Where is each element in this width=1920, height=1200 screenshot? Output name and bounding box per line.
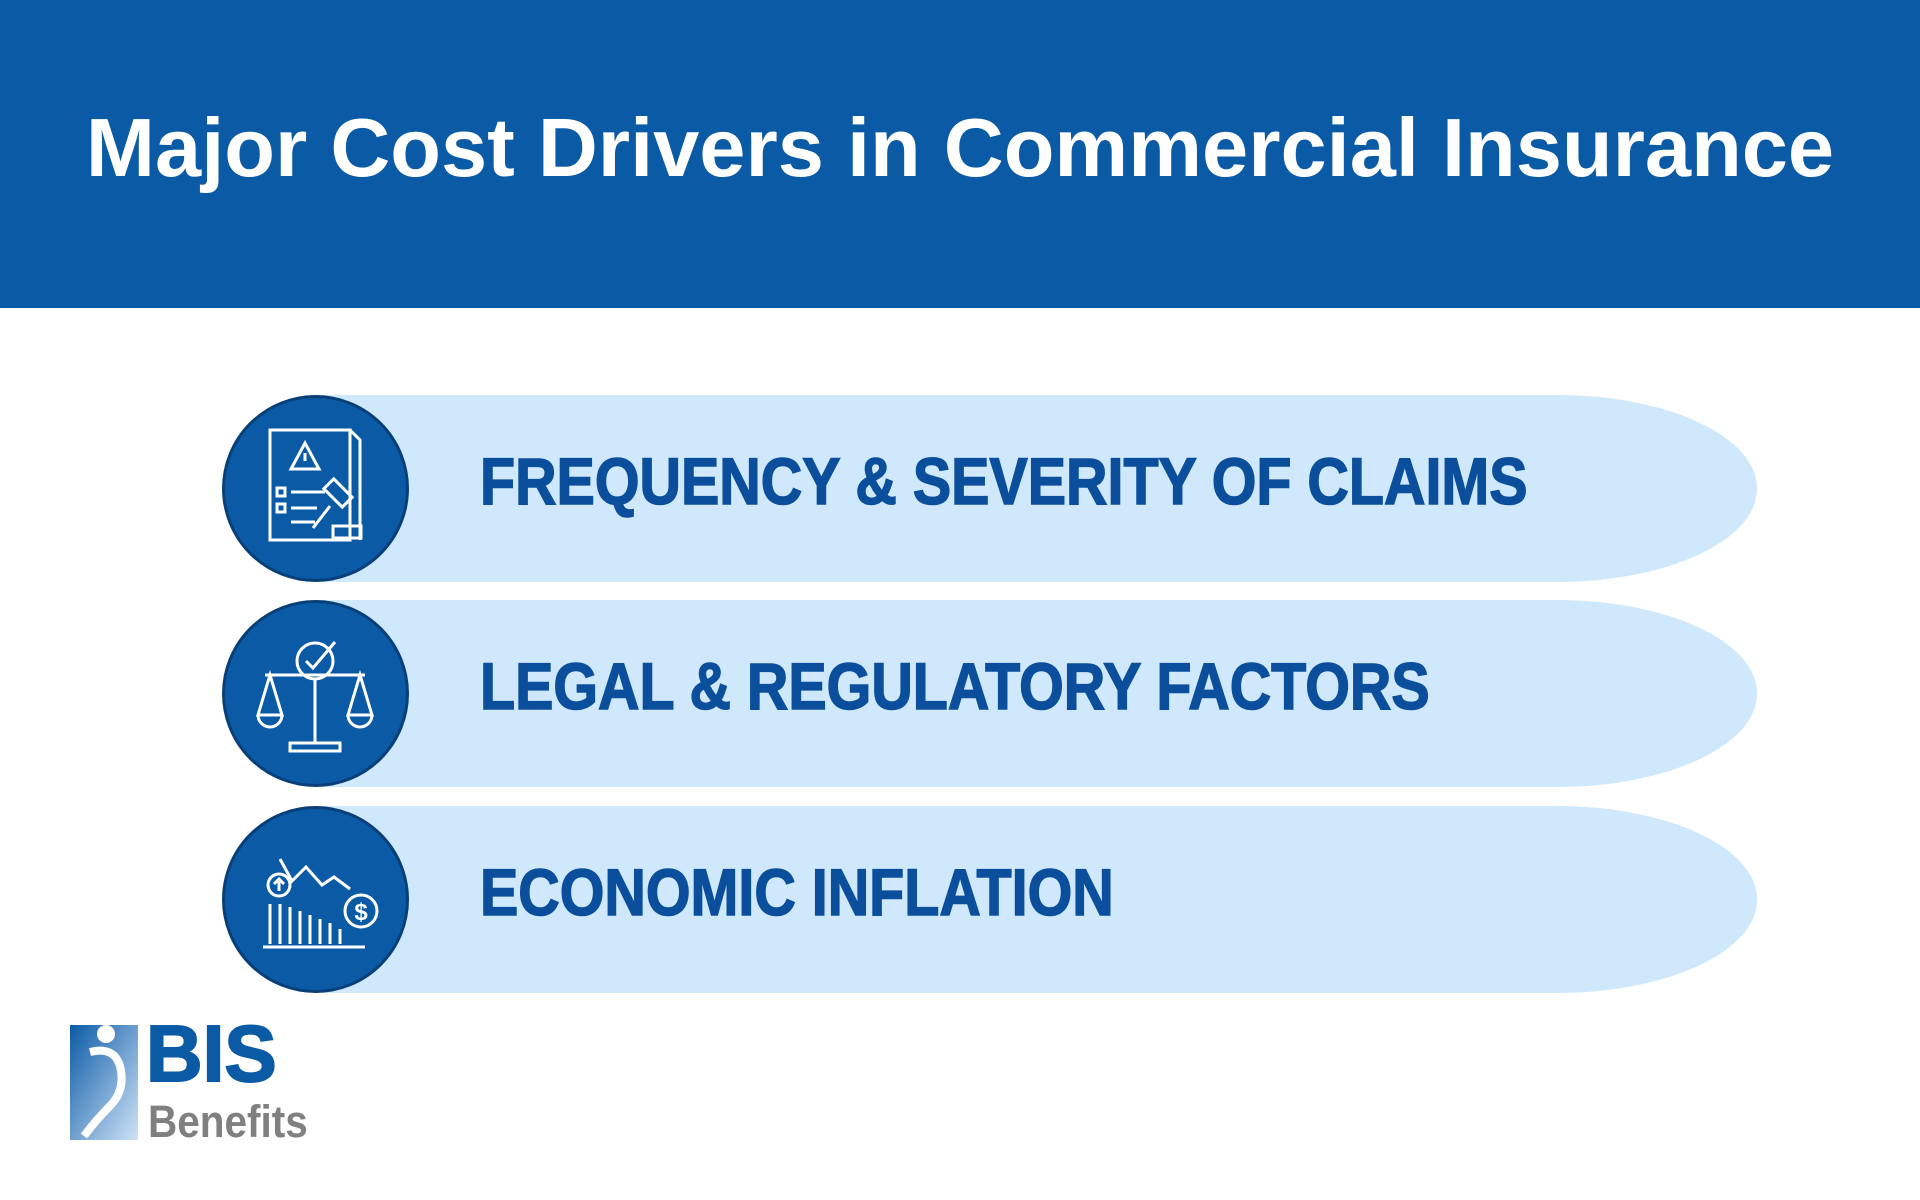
logo text: BIS: [146, 1009, 277, 1098]
label: FREQUENCY & SEVERITY OF CLAIMS: [480, 444, 1528, 518]
header banner: [0, 0, 1920, 308]
row: economic inflation: [222, 806, 1757, 993]
label: ECONOMIC INFLATION: [480, 855, 1114, 929]
logo: BIS Benefits: Benefits: [148, 1096, 308, 1147]
icon: document with warning and gavel: [222, 395, 409, 582]
label: LEGAL & REGULATORY FACTORS: [480, 649, 1430, 723]
row: frequency & severity: [222, 395, 1757, 582]
logo: BIS Benefits: [70, 1009, 308, 1147]
icon: scales with checkmark: [222, 600, 409, 787]
title: Major Cost Drivers in Commercial Insurance: [86, 101, 1834, 194]
icon: declining bar chart with dollar: $: [354, 899, 368, 926]
row: legal & regulatory: [222, 600, 1757, 787]
icon: declining bar chart with dollar: [222, 806, 409, 993]
logo mark: [70, 1025, 138, 1140]
